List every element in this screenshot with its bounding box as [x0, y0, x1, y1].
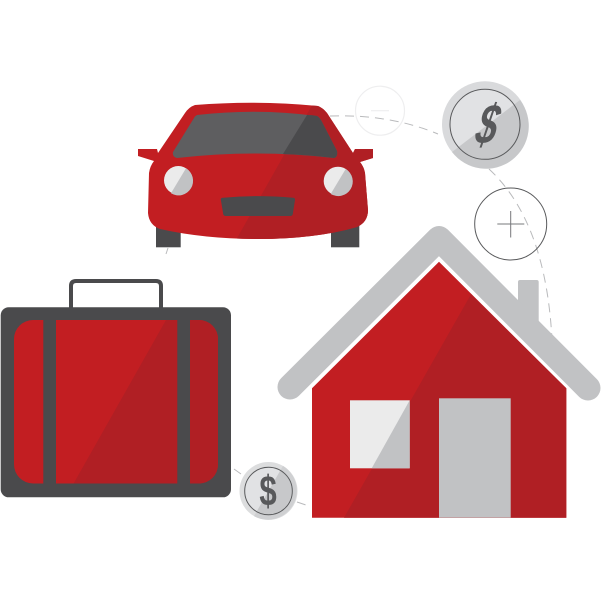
icon: small dollar coin: $: [259, 467, 277, 515]
icon: large dollar coin: $: [470, 94, 506, 156]
house door: [439, 398, 511, 518]
house window: [350, 400, 410, 468]
car: [138, 102, 373, 248]
suitcase red panel: [14, 320, 218, 484]
suitcase straps: [43, 320, 190, 484]
house chimney: [518, 280, 539, 332]
suitcase case: [1, 307, 231, 497]
car headlights: [164, 166, 353, 196]
house: [290, 238, 588, 518]
car windshield: [173, 112, 337, 158]
dashed connecting circle: [166, 116, 552, 505]
suitcase: [1, 281, 231, 497]
house roof: [290, 238, 588, 388]
car body: [138, 102, 373, 239]
suitcase handle: [71, 281, 161, 308]
car wheels: [156, 222, 359, 247]
icon: plus circle: [475, 188, 547, 260]
icon: small dollar coin: [240, 462, 298, 520]
icon: faint minus circle: [356, 86, 404, 135]
car grille: [221, 196, 295, 216]
house walls: [312, 262, 566, 518]
icon: large dollar coin: [442, 81, 529, 169]
illustration: assets: [0, 81, 600, 520]
